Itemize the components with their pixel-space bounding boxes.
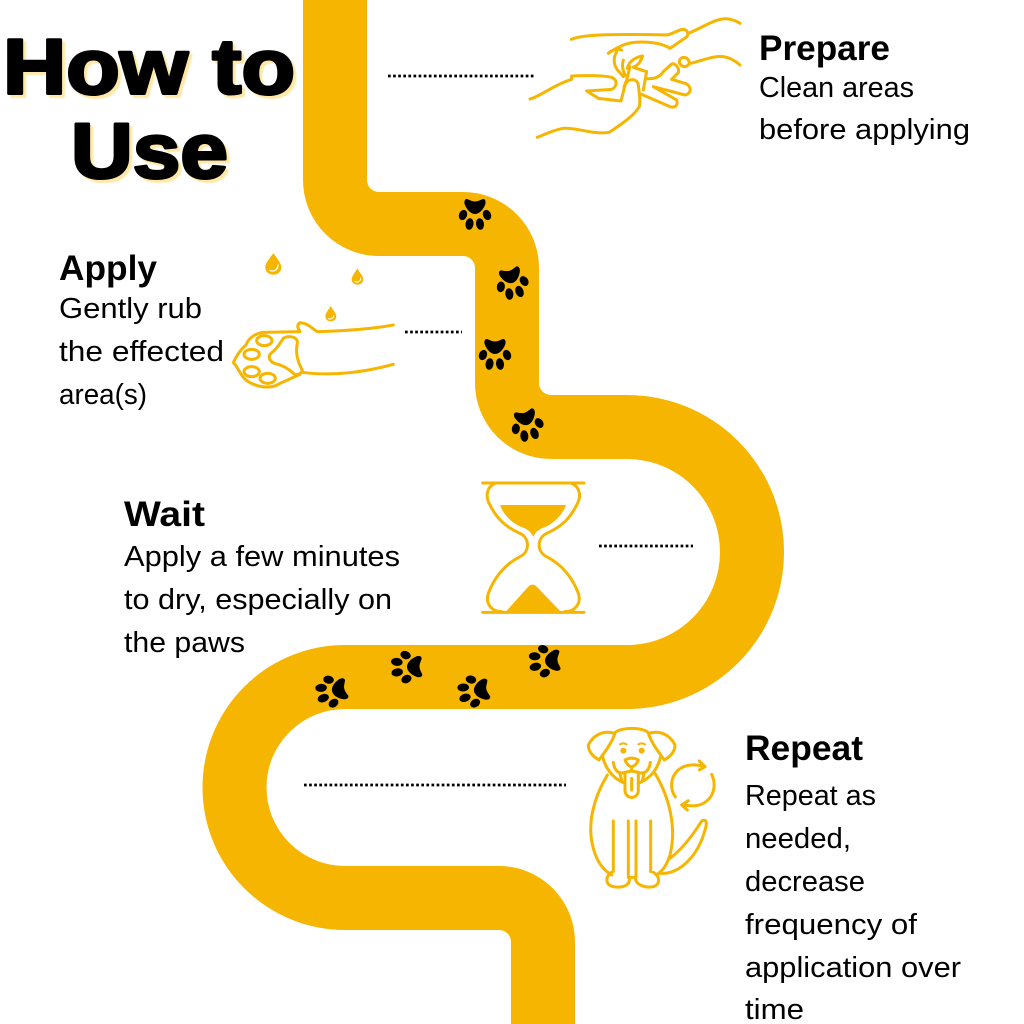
step: prepare bbox=[759, 29, 970, 146]
dotted connector: apply bbox=[405, 331, 462, 333]
step: repeat: application over bbox=[745, 952, 961, 984]
icon: paw with drops bbox=[233, 253, 393, 387]
paw prints on lower path bbox=[312, 642, 561, 712]
step: repeat: Repeat bbox=[745, 729, 863, 768]
step: repeat: decrease bbox=[745, 866, 865, 898]
title bbox=[3, 22, 295, 194]
step: prepare: Clean areas bbox=[759, 72, 914, 104]
step: apply: area(s) bbox=[59, 379, 147, 411]
oil drops bbox=[265, 253, 363, 321]
title: How to bbox=[3, 22, 295, 110]
icon: dog with repeat arrows bbox=[588, 728, 714, 887]
step: repeat: needed, bbox=[745, 823, 851, 855]
step: wait: the paws bbox=[124, 627, 245, 659]
icon: hands cleaning paw bbox=[530, 19, 740, 137]
step: apply bbox=[59, 249, 224, 411]
dotted connector: prepare bbox=[388, 75, 534, 77]
step: repeat bbox=[745, 729, 961, 1024]
step: wait: Apply a few minutes bbox=[124, 541, 400, 573]
step: repeat: frequency of bbox=[745, 909, 918, 941]
dotted connector: repeat bbox=[304, 784, 566, 786]
winding yellow path bbox=[235, 0, 752, 1024]
step: wait: Wait bbox=[124, 495, 205, 534]
step: apply: Apply bbox=[59, 249, 158, 288]
paw outline bbox=[233, 323, 393, 387]
title: Use bbox=[71, 106, 228, 194]
repeat arrows bbox=[672, 761, 714, 810]
step: prepare: before applying bbox=[759, 114, 970, 146]
step: wait: to dry, especially on bbox=[124, 584, 392, 616]
step: prepare: Prepare bbox=[759, 29, 890, 68]
paw prints on upper path bbox=[457, 199, 548, 445]
dog bbox=[588, 728, 706, 887]
step: repeat: Repeat as bbox=[745, 780, 876, 812]
step: wait bbox=[124, 495, 400, 659]
dotted connector: wait bbox=[599, 545, 693, 547]
step: apply: the effected bbox=[59, 336, 224, 368]
step: apply: Gently rub bbox=[59, 293, 202, 325]
icon: hourglass bbox=[483, 483, 584, 613]
